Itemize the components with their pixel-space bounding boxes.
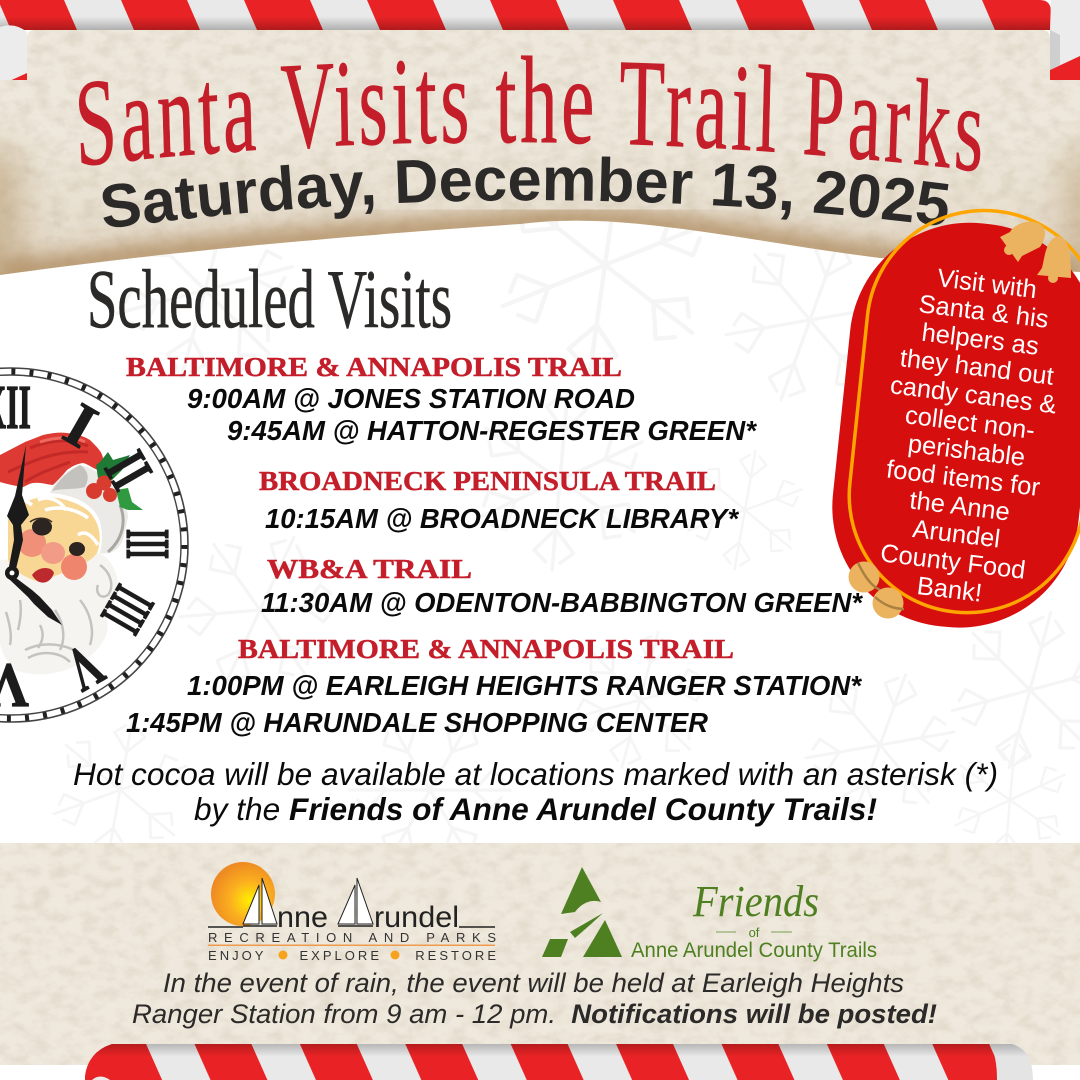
eyes [32,518,52,536]
clock hands [5,445,62,625]
logo: Friends of Anne Arundel County Trails: Anne Arundel County Trails [631,939,877,962]
logo: Anne Arundel Recreation and Parks: RECREATION AND PARKS [208,930,496,945]
logo: Anne Arundel Recreation and Parks [208,862,496,963]
roman numerals: IIII [88,575,167,644]
date subtitle: Saturday, December 13, 2025 [102,156,948,228]
cheeks and nose [18,529,46,557]
callout text: the Anne [908,486,1011,527]
roman numerals: I [53,390,108,461]
callout balloon [820,199,1080,639]
roman numerals [0,386,169,707]
logo: Friends of Anne Arundel County Trails: Friends [692,877,819,926]
holly [96,452,130,482]
roman numerals: V [54,630,114,704]
rain note: In the event of rain, the event will be held at Earleigh Heights [163,968,904,998]
top candy cane [0,0,1080,83]
logo: Anne Arundel Recreation and Parks: nne [277,901,328,934]
callout text [865,260,1072,614]
hot cocoa note: by the Friends of Anne Arundel County Trails! [194,791,877,827]
icon: jingle bells [848,562,904,618]
mouth [32,568,54,583]
roman numerals: II [91,441,165,500]
Santa illustration [0,433,143,674]
logo: Anne Arundel Recreation and Parks: ENJOY EXPLORE RESTORE [208,948,496,963]
berries [86,483,102,499]
trail heading: BROADNECK PENINSULA TRAIL [259,466,716,496]
title: Santa Visits the Trail Parks [79,55,980,172]
callout text: Santa & his [917,290,1050,334]
trail heading: BALTIMORE & ANNAPOLIS TRAIL [238,634,734,664]
beard [0,553,118,674]
trail heading: WB&A TRAIL [267,554,472,584]
bottom paper band [0,843,1080,1065]
face [8,497,100,582]
callout text: they hand out [898,344,1055,391]
hot cocoa note: Hot cocoa will be available at locations marked with an asterisk (*) [73,756,998,792]
visit time: 1:45PM @ HARUNDALE SHOPPING CENTER [126,707,708,738]
visit time: 11:30AM @ ODENTON-BABBINGTON GREEN* [261,587,863,618]
title [79,55,980,172]
hat [0,433,103,487]
visit time: 10:15AM @ BROADNECK LIBRARY* [265,503,739,534]
icon: top bells [1000,222,1071,283]
hot cocoa note [73,756,998,827]
rain note: Ranger Station from 9 am - 12 pm. Notifications will be posted! [132,999,937,1029]
logo: Friends of Anne Arundel County Trails: of [749,925,760,940]
callout text: collect non- [904,401,1036,445]
roman numerals: III [113,529,181,559]
fur trim [50,465,128,553]
logo: Anne Arundel Recreation and Parks: rundel [374,901,459,934]
callout text: perishable [906,430,1027,472]
callout text: Visit with [936,264,1038,304]
callout text: helpers as [920,319,1040,361]
heading: scheduled visits: Scheduled Visits [87,253,452,346]
background snowflakes [48,143,1080,894]
logo: Friends of Anne Arundel County Trails [542,867,877,962]
rain note [132,968,937,1029]
visit time: 1:00PM @ EARLEIGH HEIGHTS RANGER STATION* [187,670,862,701]
visit time: 9:00AM @ JONES STATION ROAD [187,383,635,414]
callout text: Arundel [911,515,1002,554]
visit time: 9:45AM @ HATTON-REGESTER GREEN* [227,415,757,446]
torn paper header [0,30,1080,275]
bottom candy cane [85,1044,1033,1080]
clock with Santa [0,368,188,722]
callout text: food items for [885,455,1042,502]
callout text: Bank! [915,572,984,608]
trail schedule [126,352,863,738]
callout text: candy canes & [889,371,1058,419]
trail heading: BALTIMORE & ANNAPOLIS TRAIL [126,352,622,382]
callout text: County Food [879,539,1027,585]
